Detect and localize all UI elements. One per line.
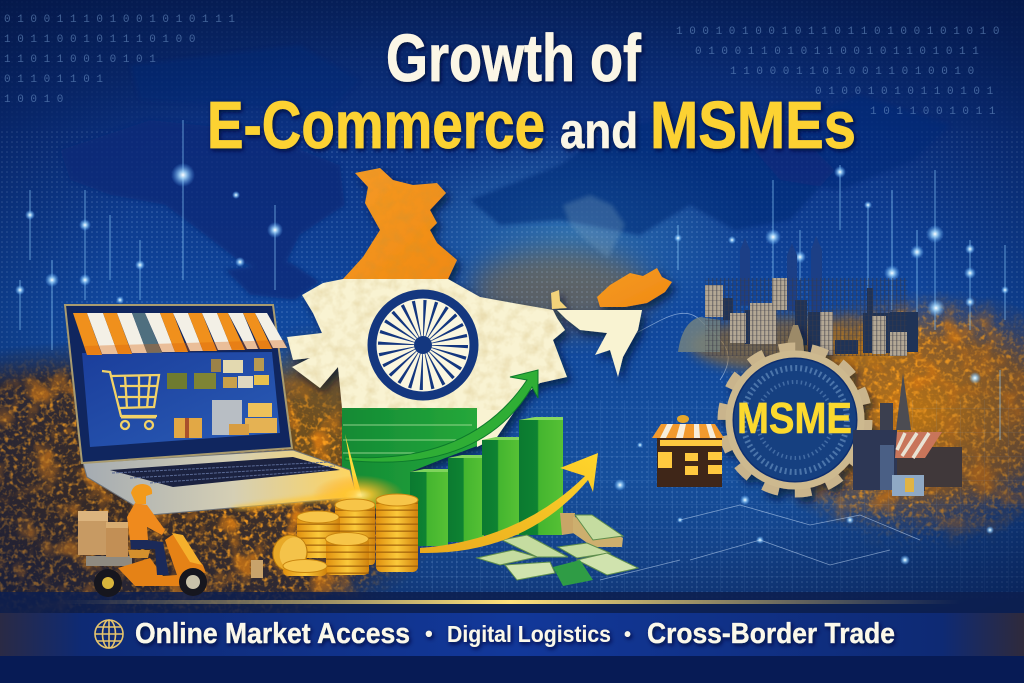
- binary code: top right: 1 0 0 1 0 1 0 0 1 0 1 1 0 1 1 0 1 0 0 1 0 1 0 1 0: [676, 26, 999, 38]
- laptop screen: [82, 352, 280, 447]
- map: north-east white: [557, 310, 642, 377]
- scooter body: [118, 533, 206, 586]
- delivery boxes: [78, 511, 128, 557]
- world map silhouette: [60, 45, 950, 300]
- coin stack back middle: [335, 499, 375, 565]
- loose notes: [502, 535, 568, 557]
- title line 2: E-Commerce: [207, 88, 545, 163]
- bundle of notes: [573, 517, 623, 547]
- Ashoka Chakra: [372, 294, 474, 396]
- gear top ornament: [787, 325, 804, 352]
- coin stacks: [251, 494, 418, 578]
- binary code: top left: [4, 14, 235, 106]
- rider legs: [130, 538, 169, 575]
- binary code: top right: [676, 26, 999, 118]
- laptop: [65, 305, 357, 515]
- factory buildings: [853, 373, 962, 496]
- yellow growth arrow: [420, 453, 598, 553]
- containers: [892, 475, 924, 496]
- map paper texture and green band lines: [289, 171, 566, 454]
- chimney 2: [880, 403, 893, 438]
- gold divider: [60, 600, 960, 604]
- shop sign: [677, 415, 689, 423]
- title line 2: [207, 88, 856, 163]
- binary code: top right: 0 1 0 0 1 1 0 1 0 1 1 0 0 1 0 1 1 0 1 0 1 1: [695, 46, 979, 58]
- rider torso: [127, 503, 165, 540]
- building windows: [705, 278, 907, 356]
- banner text: •: [624, 624, 631, 646]
- title line 2: MSMEs: [650, 88, 856, 163]
- map: north-east orange: [597, 268, 672, 307]
- scooter front wheel: [179, 568, 207, 596]
- rider helmet: [131, 484, 152, 504]
- laptop keyboard: [110, 457, 340, 487]
- shopping cart icon: [102, 371, 159, 429]
- bottom strip: [0, 613, 1024, 683]
- scooter front shield: [172, 533, 202, 565]
- title line 2: and: [560, 103, 638, 159]
- dark blocks: [723, 288, 918, 355]
- binary code: top left: 1 1 0 1 1 0 0 1 0 1 0 1: [4, 54, 156, 66]
- map: green south band: [342, 408, 477, 522]
- gear disc: [734, 359, 856, 481]
- icon: globe: [95, 620, 123, 648]
- coin flat: [283, 560, 327, 576]
- green growth arrow: [345, 370, 538, 462]
- gold spark: [230, 434, 404, 515]
- title line 1: Growth of: [386, 21, 642, 96]
- binary code: top left: 0 1 1 0 1 1 0 1: [4, 74, 103, 86]
- map: sikkim: [551, 290, 567, 309]
- shop building: [657, 438, 722, 487]
- binary code: top left: 0 1 0 0 1 1 1 0 1 0 0 1 0 1 0 1 1 1: [4, 14, 235, 26]
- title: [207, 21, 856, 163]
- MSME gear badge: [724, 325, 866, 491]
- scooter seat: [128, 550, 150, 558]
- MSME label: MSME: [737, 394, 852, 443]
- light land patch: [563, 195, 625, 258]
- growth bars: [410, 417, 563, 546]
- banner text: [135, 618, 895, 650]
- bar 3: [482, 437, 519, 535]
- product boxes: [174, 400, 277, 438]
- bar 1: [410, 469, 448, 546]
- gear ring: [729, 354, 861, 486]
- network lights and vertical light trails: [15, 120, 1009, 580]
- scooter rear wheel: [94, 569, 122, 597]
- binary code: top left: 1 0 1 1 0 0 1 0 1 1 1 0 1 0 0: [4, 34, 195, 46]
- small shop: [652, 415, 724, 487]
- warm haze behind city: [690, 317, 910, 373]
- map: orange north band: [343, 168, 457, 279]
- banknotes: [477, 513, 638, 586]
- binary code: top right: 1 0 1 1 0 0 1 0 1 1: [870, 106, 996, 118]
- coin stack left: [297, 511, 340, 558]
- India map in tricolour: [287, 168, 672, 522]
- gear teeth: [724, 349, 866, 491]
- small parcel: [251, 560, 263, 578]
- footer: [0, 656, 1024, 683]
- delivery scooter with rider: [78, 484, 207, 597]
- laptop base: [83, 450, 357, 515]
- dark strip above banner: [0, 592, 1024, 613]
- scooter rack: [86, 556, 132, 566]
- shop windows: [658, 440, 722, 475]
- mid-rise blocks: [705, 278, 907, 356]
- banner text: Cross-Border Trade: [647, 618, 895, 650]
- banner text: Digital Logistics: [447, 621, 611, 647]
- blue banner: [0, 613, 1024, 656]
- bar 2: [448, 455, 484, 542]
- skyscraper towers: [740, 236, 822, 345]
- dome: [678, 317, 720, 352]
- factory striped awning: [895, 432, 942, 458]
- coin stack front: [326, 532, 369, 575]
- product thumbnails: [167, 358, 269, 389]
- bar 4: [519, 417, 563, 535]
- banner text: Online Market Access: [135, 618, 410, 650]
- factory chimney: [896, 373, 911, 430]
- binary code: top left: 1 0 0 1 0: [4, 94, 63, 106]
- shop awning: [73, 313, 287, 355]
- binary code: top right: 1 1 0 0 0 1 1 0 1 0 0 1 1 0 1 0 0 1 0: [730, 66, 974, 78]
- factory blocks: [853, 430, 897, 490]
- coin standing: [268, 531, 312, 575]
- coin stack tall: [376, 494, 418, 572]
- map: white centre band: [287, 279, 567, 447]
- shop awning: [652, 424, 724, 438]
- binary code: top right: 0 1 0 0 1 0 1 0 1 1 0 1 0 1: [815, 86, 994, 98]
- laptop lid: [65, 305, 292, 463]
- banner text: •: [425, 621, 433, 646]
- city skyline: [678, 236, 918, 373]
